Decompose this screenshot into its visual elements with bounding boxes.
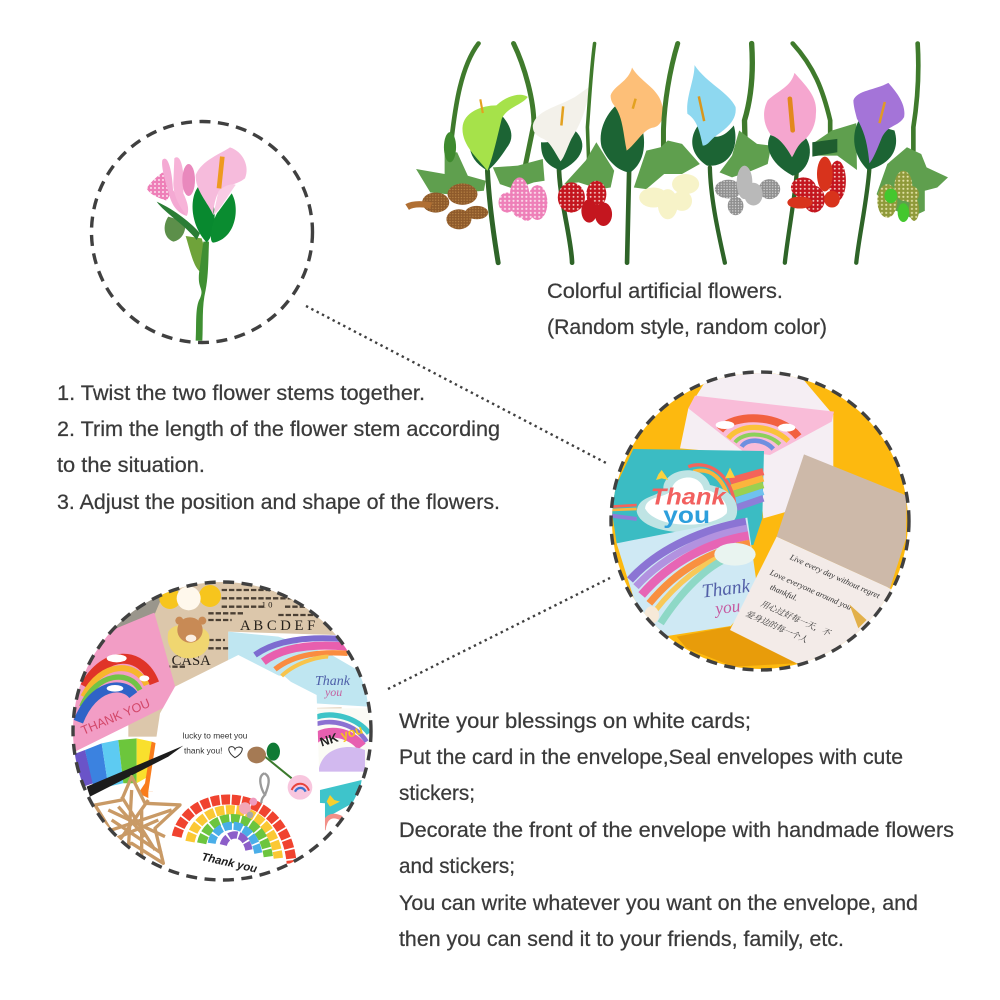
circle photo: rainbow thank-you cards on yellow (612, 373, 908, 669)
newspaper background (108, 580, 342, 737)
card lettering: Thank (315, 674, 351, 689)
card lettering: Thank (651, 483, 727, 509)
dashed border of card circle (611, 372, 909, 670)
flower: purple calla with red-orange stamens (787, 43, 904, 263)
newspaper background: CASA (172, 653, 211, 669)
white envelope (148, 655, 320, 800)
middle right rainbow card (313, 708, 372, 772)
icon: pink calla and stamen bouquet (147, 147, 247, 341)
flower: green stamen bundle (877, 43, 948, 222)
card lettering: THANK YOU (79, 696, 152, 738)
text block: flower making steps: to the situation. (57, 454, 205, 477)
upper right rainbow card: you (324, 685, 342, 699)
lower right teal card corner (320, 780, 362, 833)
card lettering: Thank (701, 576, 752, 603)
text block: flower making steps (57, 382, 500, 514)
newspaper background: 1 0 (262, 599, 272, 609)
text block: card writing instructions: then you can send it to your friends, family, etc. (399, 928, 844, 951)
rattan star (95, 777, 180, 863)
text block: card writing instructions: Decorate the front of the envelope with handmade flowers (399, 819, 954, 842)
flower: green calla with bronze stamens (405, 43, 528, 263)
circle photo: envelope flatlay with rainbow cards (73, 582, 370, 872)
dashed border of envelope circle (73, 582, 371, 880)
handwritten open card: 用心过好每一天，不 (759, 598, 833, 639)
bear figurine (168, 617, 209, 658)
connector: dotted line from card circle to lower circle (388, 578, 610, 689)
handwritten open card: Love everyone around you (768, 568, 853, 612)
keychain charm (239, 773, 269, 818)
dashed circle (92, 122, 312, 342)
flower: peach calla with red stamens (558, 43, 663, 263)
teal Thank you card (610, 449, 764, 545)
flower: blue calla with cream stamens (634, 43, 736, 263)
handwritten open card (730, 454, 907, 665)
text block: flower making steps: 3. Adjust the position and shape of the flowers. (57, 491, 500, 514)
text block: card writing instructions: You can write whatever you want on the envelope, and (399, 892, 918, 915)
handwritten open card: thankful. (769, 583, 799, 603)
text block: flower making steps: 1. Twist the two flower stems together. (57, 382, 425, 405)
pastel rainbow Thank you card: you (712, 596, 742, 619)
circle callout: twisted pink flower (92, 122, 312, 342)
handwriting on envelope: lucky to meet you (183, 731, 248, 741)
card lettering: NK you (318, 722, 365, 750)
card lettering: Thank you (200, 851, 258, 876)
caption: colorful artificial flowers: (Random style, random color) (547, 316, 827, 339)
teal Thank you card: you (663, 502, 710, 528)
black pen (87, 746, 183, 797)
pink thank you card (72, 613, 179, 753)
icon: heart outline (229, 747, 242, 758)
text block: card writing instructions (399, 710, 954, 951)
white envelope: thank you! (184, 745, 222, 755)
text block: card writing instructions: and stickers; (399, 855, 515, 878)
flower: pink calla with silver stamens (715, 43, 816, 263)
upper right rainbow card (228, 632, 370, 710)
handwritten open card: 爱身边的每一个人 (744, 608, 810, 645)
rainbow color blocks (72, 738, 157, 800)
envelope with pink rainbow card (680, 372, 834, 518)
text block: flower making steps: 2. Trim the length of the flower stem according (57, 418, 500, 441)
handwritten open card: Live every day without regret (788, 552, 882, 601)
image: row of seven colorful artificial flowers (405, 43, 948, 263)
small flower with sticker (247, 743, 312, 800)
pastel rainbow Thank you card (617, 518, 758, 637)
mosaic rainbow thank-you card (148, 792, 325, 872)
yellow pom-poms (159, 585, 221, 610)
text block: card writing instructions: Write your blessings on white cards; (399, 710, 751, 733)
flower: white calla with pink stamens (493, 43, 589, 263)
text block: card writing instructions: Put the card in the envelope,Seal envelopes with cute (399, 746, 903, 769)
connector: dotted line from flower circle to card circle (306, 306, 608, 464)
caption: colorful artificial flowers: Colorful artificial flowers. (547, 280, 783, 303)
newspaper background: A B C D E F (240, 618, 315, 634)
background yellow (612, 373, 908, 669)
white base (65, 570, 385, 890)
text block: card writing instructions: stickers; (399, 782, 475, 805)
caption: colorful artificial flowers (547, 280, 827, 339)
